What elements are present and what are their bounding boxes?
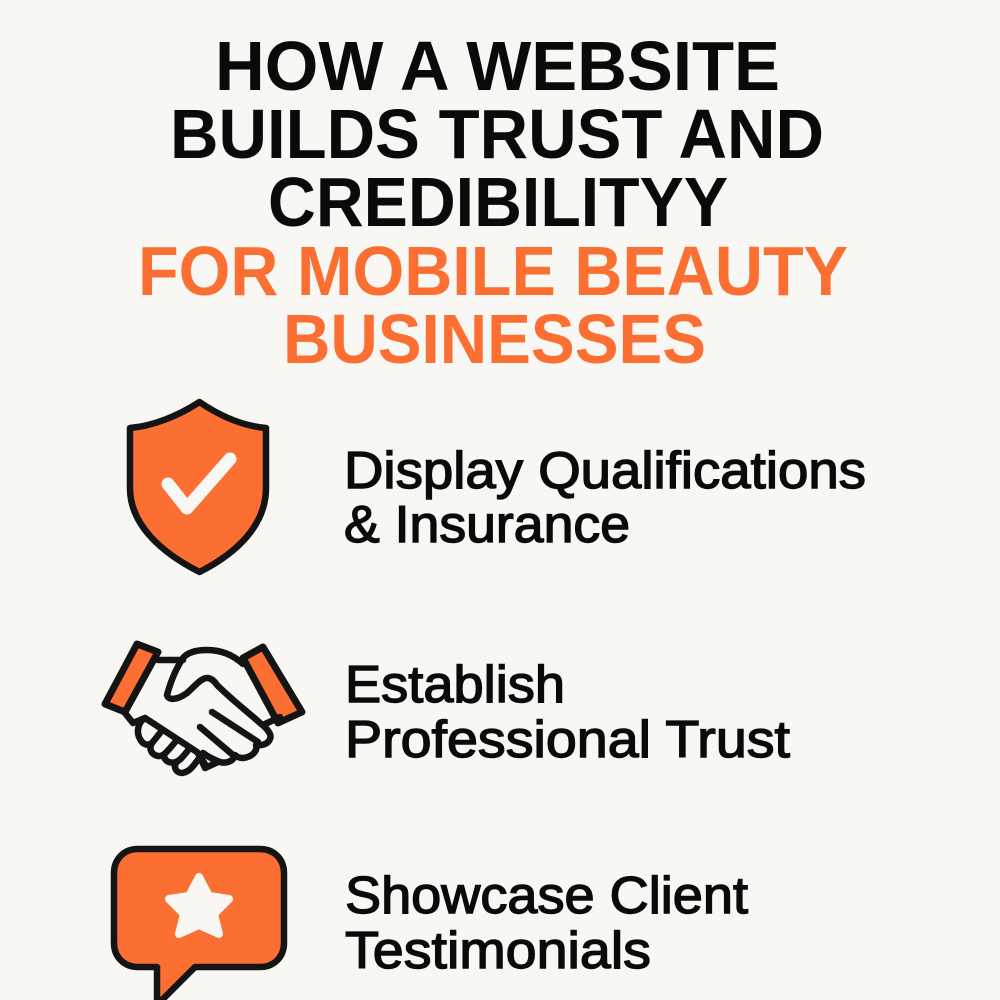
title: HOW A WEBSITE xyxy=(215,27,780,105)
text: display qualifications and insurance: & Insurance xyxy=(344,496,630,554)
text: display qualifications and insurance: Display Qualifications xyxy=(344,442,866,500)
title: FOR MOBILE BEAUTY xyxy=(138,232,848,310)
text: display qualifications and insurance xyxy=(344,442,866,554)
title: BUSINESSES xyxy=(283,300,706,378)
text: establish professional trust: Establish xyxy=(345,656,565,714)
icon part: right cuff xyxy=(243,647,302,723)
icon part: hands outline xyxy=(125,650,280,773)
text: showcase client testimonials: Showcase Client xyxy=(345,867,749,925)
text: showcase client testimonials xyxy=(345,867,749,980)
icon part: left cuff xyxy=(105,644,158,712)
text: establish professional trust xyxy=(345,656,791,769)
icon: shield with check mark xyxy=(130,402,266,572)
title: BUILDS TRUST AND xyxy=(170,95,824,173)
title: CREDIBILITYY xyxy=(268,163,728,241)
title xyxy=(138,27,848,378)
text: showcase client testimonials: Testimonials xyxy=(345,922,651,980)
icon: handshake xyxy=(105,644,302,773)
icon: speech bubble with star xyxy=(114,849,284,1000)
text: establish professional trust: Professional Trust xyxy=(345,711,791,769)
